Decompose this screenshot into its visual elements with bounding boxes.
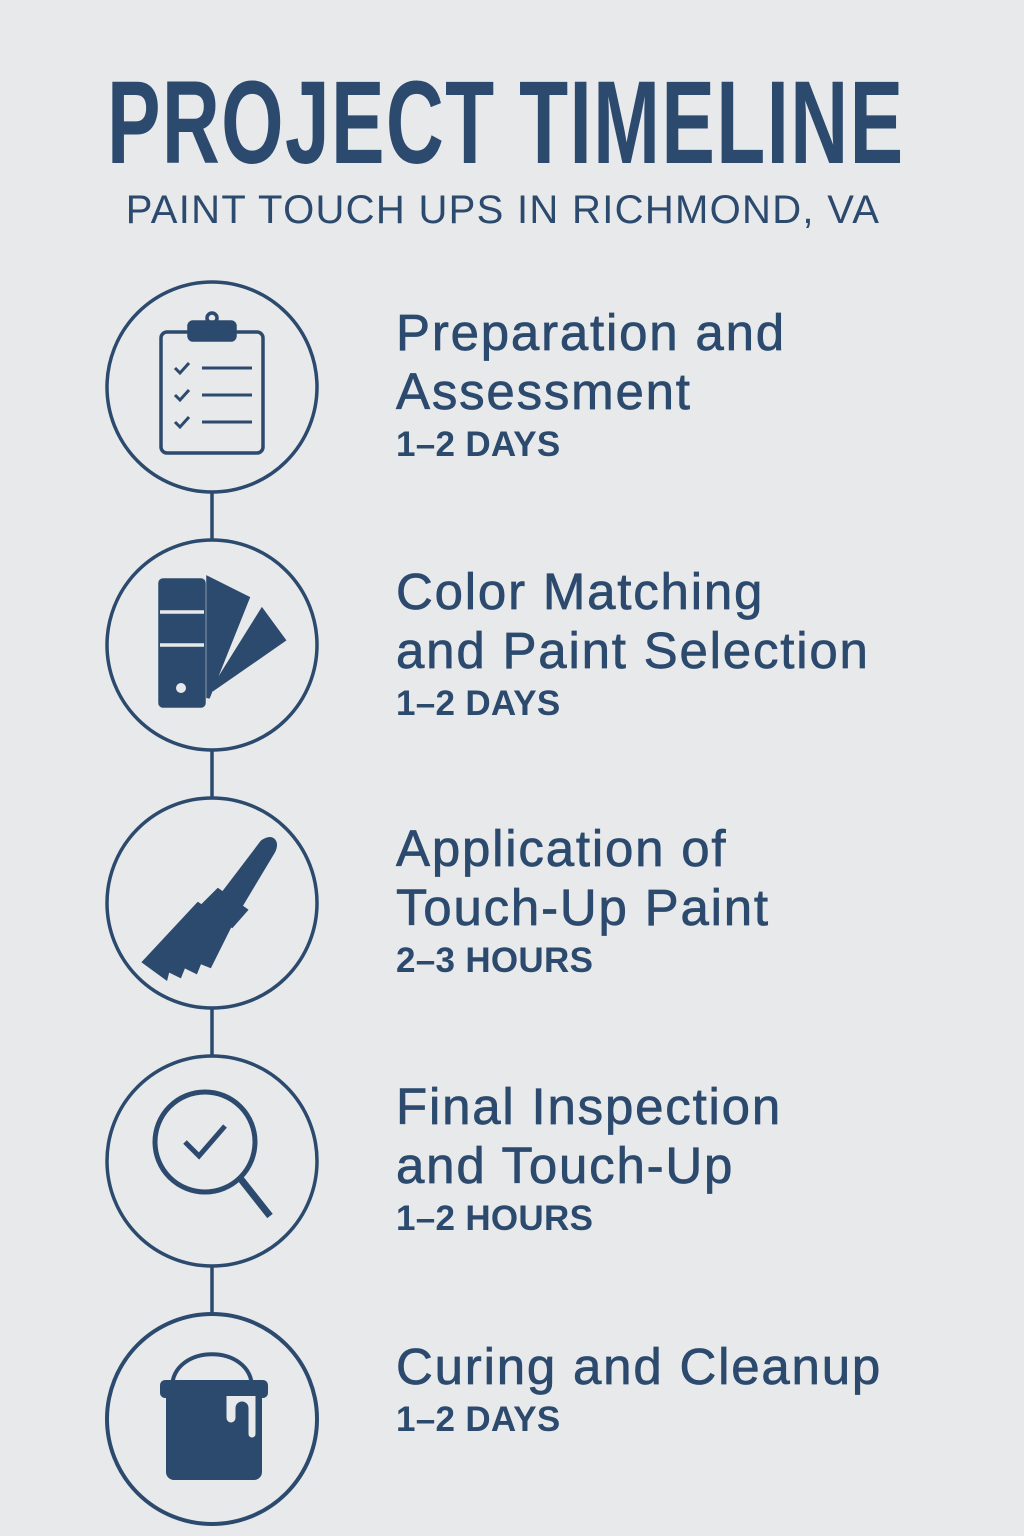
step 1 text: [396, 304, 786, 464]
step 5 text: [396, 1338, 882, 1439]
icon: paint brush: [107, 798, 317, 1008]
icon: color swatches: [107, 540, 317, 750]
step 2 text: Color Matching: [396, 563, 764, 620]
icon: paint bucket: [107, 1314, 317, 1524]
step 1 text: 1–2 DAYS: [396, 425, 561, 464]
step 4 text: Final Inspection: [396, 1078, 782, 1135]
icon: clipboard: [107, 282, 317, 492]
step 3 text: [396, 820, 770, 980]
subtitle: PAINT TOUCH UPS IN RICHMOND, VA: [126, 188, 880, 232]
step 2 text: and Paint Selection: [396, 622, 870, 679]
step 4 text: and Touch-Up: [396, 1137, 734, 1194]
step 4 text: 1–2 HOURS: [396, 1199, 593, 1238]
step 4 text: [396, 1078, 782, 1238]
step 5 text: 1–2 DAYS: [396, 1400, 561, 1439]
step 5 text: Curing and Cleanup: [396, 1338, 882, 1395]
title: PROJECT TIMELINE: [107, 57, 904, 189]
step 2 text: [396, 563, 870, 723]
icon: magnifier check: [107, 1056, 317, 1266]
step 1 text: Preparation and: [396, 304, 786, 361]
step 3 text: Application of: [396, 820, 727, 877]
step 2 text: 1–2 DAYS: [396, 684, 561, 723]
step 3 text: 2–3 HOURS: [396, 941, 593, 980]
step 3 text: Touch-Up Paint: [396, 879, 770, 936]
step 1 text: Assessment: [396, 363, 692, 420]
